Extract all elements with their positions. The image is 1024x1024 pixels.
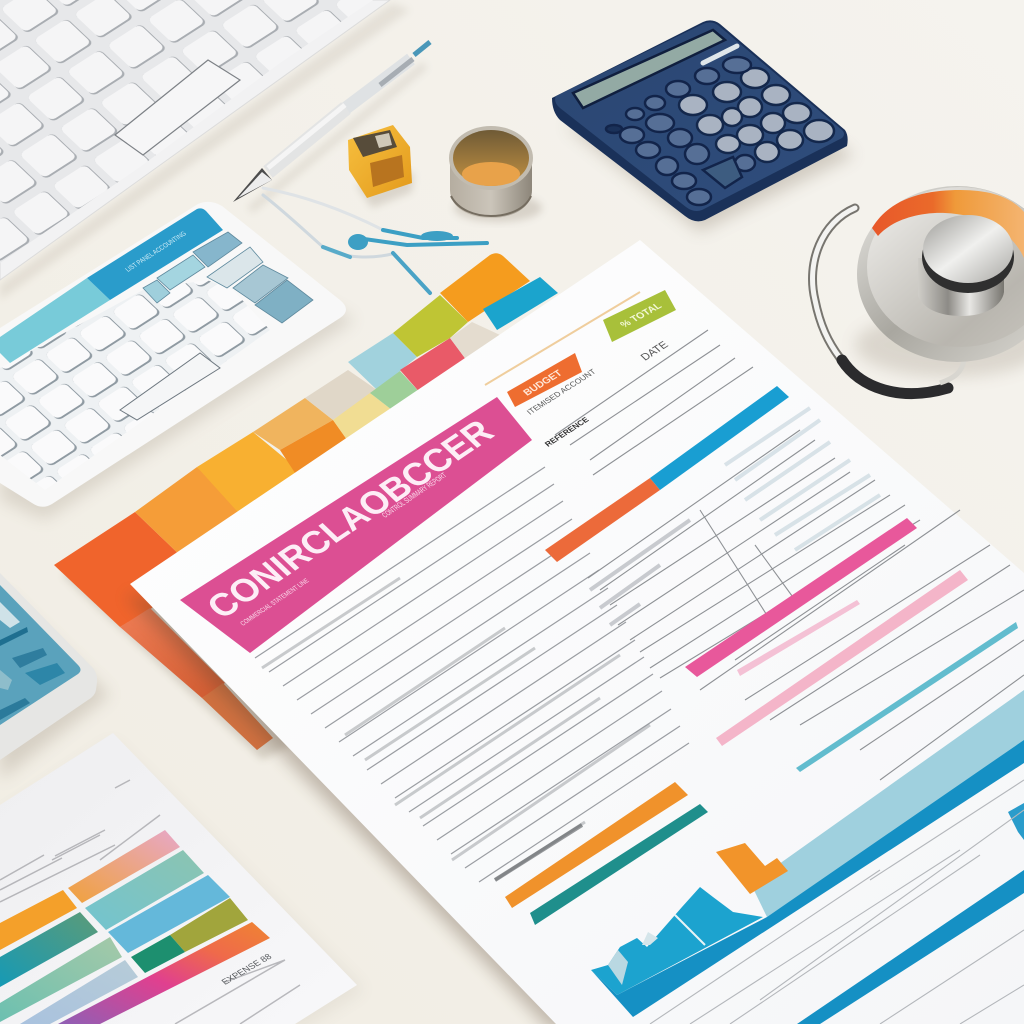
keyboard teal header [0,278,110,363]
left column dark copy [262,578,650,880]
header tags: BUDGET [521,368,565,398]
cube front window [370,155,404,187]
stethoscope orange band [872,190,1024,258]
tab dark orange [280,420,350,476]
tab red pink [400,338,470,395]
stethoscope [813,186,1024,393]
pale blue band [751,690,1024,917]
tab lime [393,295,468,357]
caption above bars [495,825,582,880]
lower lines [650,780,1024,1024]
tab yellow orange [197,432,305,520]
title banner [180,397,532,653]
keyboard key field [0,280,270,490]
folder red flap [54,512,185,627]
earbud wires [263,188,487,293]
blue area chart [591,887,763,995]
right column header bar [545,386,789,562]
calculator screen [573,30,725,108]
lower left paper [0,733,365,1024]
main paper [130,240,1024,1024]
lime tag [603,290,676,342]
tab amber [253,398,333,450]
stethoscope tube [813,208,855,358]
gold cube [348,125,414,208]
calculator dark keys [606,57,755,205]
tab green [370,371,422,410]
bottom chart [591,690,1024,1024]
cube top [353,130,397,157]
left column text lines [255,467,689,882]
header tags [485,290,676,448]
white keyboard top left [0,0,410,300]
calculator keys [0,602,65,720]
title small line: COMMERCIAL STATEMENT LINE [239,578,311,627]
title text: CONIRCLAOBCCER [198,412,502,626]
tab beige [305,370,377,420]
header tags: % TOTAL [618,301,664,330]
orange and green bars [495,782,708,925]
white keyboard with blue keys [0,202,355,520]
tab light blue [348,333,417,390]
right column pale table text [725,408,880,550]
spacebar [115,60,240,155]
coloured folder with tabs [54,253,558,760]
metal cup [449,126,542,222]
calculator teal face [0,585,80,725]
header text: DATE [639,339,671,363]
keyboard spacebar [120,353,220,420]
key field [0,0,373,263]
pen [233,42,430,210]
pink bars [685,518,968,746]
keyboard blue header [87,208,223,300]
navy calculator [552,20,855,232]
pen body [268,108,346,172]
pen nib [233,168,272,202]
chart pale notches [608,950,628,985]
folder middle [120,608,225,698]
blue band [591,740,1024,1017]
mini blue chip [1008,803,1024,840]
main paper shadow [125,595,600,1024]
folder end [202,683,273,750]
stethoscope chest piece [918,258,1004,316]
tab orange [135,467,250,560]
orange block [716,843,788,894]
stethoscope disc [857,186,1024,362]
title subtext: CONTROL SUMMARY REPORT [380,471,449,519]
header tags: ITEMISED ACCOUNT [525,367,598,416]
header tags: REFERENCE [543,416,591,448]
orange tag [507,353,582,407]
teal stripe [796,622,1018,772]
tab orange top [440,253,530,322]
left blue calculator [0,573,110,780]
lower paper label: EXPENSE 88 [219,952,274,986]
tab cyan [483,277,558,330]
keyboard blue keys [143,232,313,323]
lower blue band [797,870,1024,1024]
lower paper rows [68,830,180,903]
right column table lines [555,330,1024,780]
tab beige small [450,322,500,365]
calculator silver keys [679,68,834,162]
header text: LIST PANEL ACCOUNTING [124,231,188,273]
pen tip [414,42,430,55]
lower paper lines [0,780,300,1024]
tab pale yellow [333,393,392,444]
